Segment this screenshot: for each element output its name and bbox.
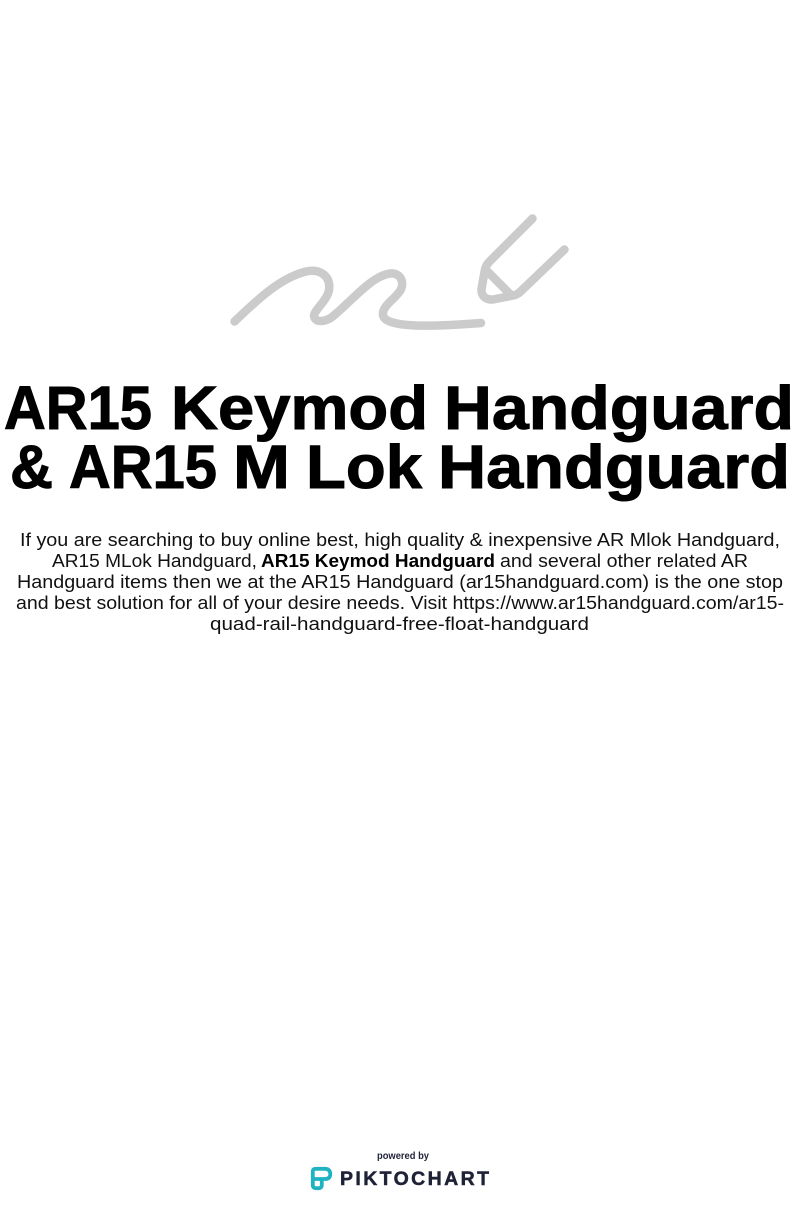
body paragraph: AR15 MLok Handguard, (52, 551, 257, 571)
title: Lok (306, 433, 422, 501)
body paragraph: and several other related AR (500, 551, 748, 571)
title: Keymod (171, 374, 428, 442)
body paragraph: quad-rail-handguard-free-float-handguard (210, 614, 589, 634)
title: & (10, 433, 53, 501)
title: M (233, 433, 290, 501)
title (4, 374, 794, 501)
icon: Piktochart P mark (313, 1169, 330, 1188)
icon: pen signature scribble (234, 218, 564, 326)
powered by label: powered by (377, 1150, 429, 1162)
body paragraph (16, 530, 784, 634)
body paragraph: If you are searching to buy online best, high quality & inexpensive AR Mlok Handguard, (20, 530, 780, 550)
body paragraph: Handguard items then we at the AR15 Handguard (ar15handguard.com) is the one stop (17, 572, 783, 592)
title: Handguard (444, 374, 794, 442)
body paragraph: AR15 Keymod Handguard (261, 551, 495, 571)
footer: powered by Piktochart logo (313, 1150, 489, 1190)
title: AR15 (69, 433, 217, 501)
title: AR15 (4, 374, 152, 442)
body paragraph: and best solution for all of your desire needs. Visit https://www.ar15handguard.com/ar15- (16, 593, 784, 613)
Piktochart wordmark: PIKTOCHART (340, 1168, 489, 1190)
title: Handguard (438, 433, 790, 501)
